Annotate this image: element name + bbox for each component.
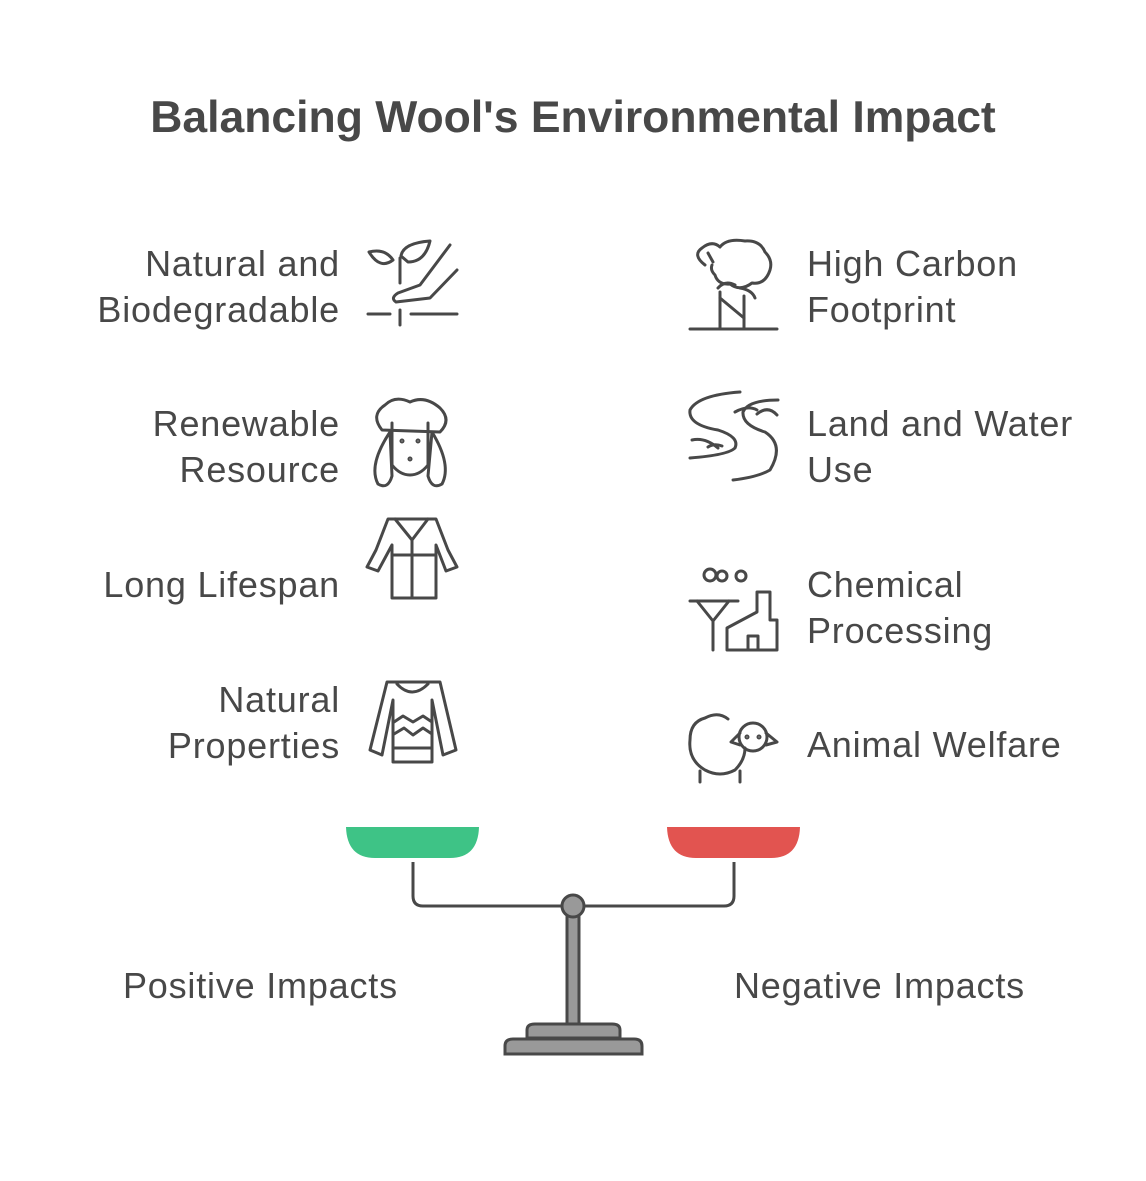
text: chemical processing bbox=[807, 564, 993, 651]
scale bbox=[346, 827, 800, 1054]
green pan bbox=[346, 827, 479, 858]
title: Balancing Wool's Environmental Impact bbox=[150, 93, 996, 142]
text: land and water use: Use bbox=[807, 449, 873, 490]
text: natural properties: Properties bbox=[168, 725, 340, 766]
text: high carbon footprint: High Carbon bbox=[807, 243, 1018, 284]
text: natural properties bbox=[168, 679, 340, 766]
icon: river bbox=[690, 392, 778, 480]
icon: sheep on tree bbox=[690, 240, 777, 329]
text: natural properties: Natural bbox=[218, 679, 340, 720]
text: high carbon footprint: Footprint bbox=[807, 289, 956, 330]
text: natural and biodegradable: Natural and bbox=[145, 243, 340, 284]
text: renewable resource bbox=[153, 403, 340, 490]
icon: plant in hand bbox=[368, 241, 457, 325]
text: renewable resource: Resource bbox=[180, 449, 340, 490]
text: chemical processing: Chemical bbox=[807, 564, 963, 605]
text: chemical processing: Processing bbox=[807, 610, 993, 651]
red pan bbox=[667, 827, 800, 858]
icon: coat bbox=[367, 519, 457, 598]
text: negative impacts: Negative Impacts bbox=[734, 965, 1025, 1006]
icon: sheep face bbox=[375, 399, 446, 486]
text: high carbon footprint bbox=[807, 243, 1018, 330]
text: land and water use: Land and Water bbox=[807, 403, 1073, 444]
text: positive impacts: Positive Impacts bbox=[123, 965, 398, 1006]
text: natural and biodegradable bbox=[97, 243, 340, 330]
icon: factory and glass bbox=[690, 569, 777, 650]
text: long lifespan: Long Lifespan bbox=[103, 564, 340, 605]
icon: sheep bbox=[690, 715, 777, 782]
text: natural and biodegradable: Biodegradable bbox=[97, 289, 340, 330]
icon: sweater bbox=[370, 682, 456, 762]
text: animal welfare: Animal Welfare bbox=[807, 724, 1062, 765]
text: land and water use bbox=[807, 403, 1073, 490]
text: renewable resource: Renewable bbox=[153, 403, 340, 444]
